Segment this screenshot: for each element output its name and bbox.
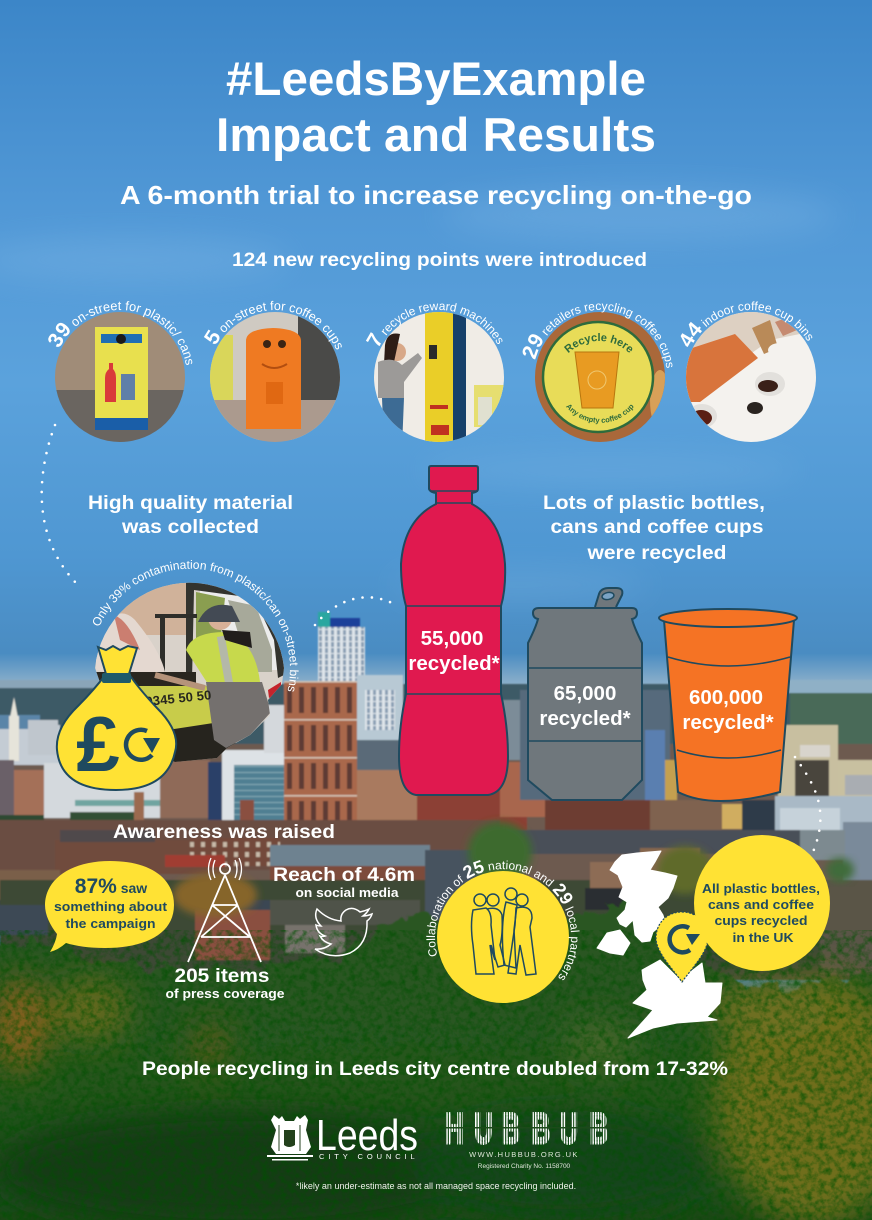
speech bubble: 87 percent: something about bbox=[54, 899, 168, 914]
plastic bottle with count bbox=[399, 466, 508, 795]
callout: recycled in the UK: cans and coffee bbox=[708, 897, 814, 912]
heading: awareness: Awareness was raised bbox=[113, 821, 335, 843]
label: 5 on-street: 5 on-street for coffee cups bbox=[204, 300, 342, 350]
photo: recycle here sticker: Any empty coffee cup bbox=[566, 404, 634, 424]
photo: orange bin bbox=[210, 312, 340, 442]
icon: transmission tower bbox=[188, 858, 261, 962]
callout: recycled in the UK: All plastic bottles, bbox=[702, 881, 820, 896]
subtitle: A 6-month trial to increase recycling on-the-go bbox=[120, 180, 752, 210]
panel: 7 recycle reward machines bbox=[366, 303, 504, 442]
photo: waste worker bbox=[95, 582, 284, 762]
icon: money bag bbox=[57, 646, 176, 790]
headline result: People recycling in Leeds city centre doubled from 17-32% bbox=[142, 1059, 728, 1080]
logo: Hubbub: HUBBUB bbox=[445, 1105, 608, 1153]
stat: social reach: Reach of 4.6m bbox=[273, 864, 415, 886]
logo: Hubbub: Registered Charity No. 1158700 bbox=[478, 1163, 571, 1170]
map: UK bbox=[597, 851, 722, 1038]
stat: press coverage: of press coverage bbox=[166, 987, 285, 1001]
plastic bottle with count: recycled* bbox=[408, 652, 500, 675]
footnote: *likely an under-estimate as not all managed space recycling included. bbox=[296, 1181, 576, 1191]
logo: Leeds City Council: Leeds bbox=[316, 1111, 418, 1160]
icon: location pin bbox=[656, 912, 708, 982]
drinks can with count bbox=[528, 588, 642, 800]
stat: social reach bbox=[273, 864, 415, 900]
panel: 39 on-street bins for plastic and cans bbox=[48, 301, 192, 442]
drinks can with count: recycled* bbox=[539, 707, 631, 730]
heading: lots recycled: were recycled bbox=[586, 543, 726, 564]
label: collaboration arc: Collaboration of 25 national and 29 local partners bbox=[426, 860, 580, 980]
stat: press coverage: 205 items bbox=[174, 965, 270, 987]
coffee cup with count bbox=[659, 609, 797, 801]
panel: worker photo bbox=[93, 560, 299, 762]
panel: 44 indoor coffee cup bins bbox=[680, 301, 816, 442]
coffee cup with count: recycled* bbox=[682, 711, 774, 734]
label: 7 recycle reward machines: 7 recycle reward machines bbox=[366, 303, 502, 346]
photo: recycle here sticker bbox=[535, 312, 665, 442]
logo: Hubbub: WWW.HUBBUB.ORG.UK bbox=[469, 1150, 579, 1159]
photo: indoor bin holes bbox=[686, 312, 816, 442]
photo: yellow bin bbox=[55, 312, 185, 442]
plastic bottle with count: 55,000 bbox=[421, 627, 483, 650]
title: #LeedsByExample bbox=[226, 53, 646, 106]
dotted connector to bottle bbox=[315, 597, 392, 625]
heading: lots recycled bbox=[543, 493, 765, 564]
icon: money bag: £ bbox=[76, 700, 120, 788]
speech bubble: 87 percent: the campaign bbox=[66, 916, 156, 931]
callout: recycled in the UK: cups recycled bbox=[714, 913, 808, 928]
logo: Leeds City Council bbox=[267, 1111, 419, 1161]
panel: 29 retailers recycling coffee cups bbox=[522, 303, 672, 442]
heading: lots recycled: Lots of plastic bottles, bbox=[543, 493, 765, 514]
icon: twitter bird bbox=[315, 908, 372, 956]
callout: recycled in the UK bbox=[694, 835, 830, 971]
speech bubble: 87 percent bbox=[45, 861, 174, 952]
label: 44 indoor bins: 44 indoor coffee cup bins bbox=[680, 301, 812, 347]
logo: Leeds City Council: CITY COUNCIL bbox=[319, 1152, 419, 1161]
photo: waste worker: 0345 50 50 bbox=[145, 687, 212, 709]
title bbox=[216, 53, 656, 162]
title: Impact and Results bbox=[216, 109, 656, 162]
stat: press coverage bbox=[166, 965, 285, 1001]
heading: lots recycled: cans and coffee cups bbox=[550, 517, 764, 538]
dotted connector right bbox=[795, 757, 820, 852]
photo: woman at reward machine bbox=[374, 312, 504, 442]
panel: partner collaboration bbox=[426, 860, 580, 1003]
icon: group of people bbox=[472, 888, 536, 975]
stat: social reach: on social media bbox=[296, 886, 400, 900]
callout: recycled in the UK: in the UK bbox=[732, 930, 794, 945]
label: 39 on-street: 39 on-street for plastic/ cans bbox=[48, 301, 192, 365]
panel: 5 on-street coffee cup bins bbox=[204, 300, 342, 442]
drinks can with count: 65,000 bbox=[554, 682, 616, 705]
label: 29 retailers: 29 retailers recycling coffee cups bbox=[522, 303, 672, 368]
label: contamination arc: Only 39% contamination from plastic/can on-street bins bbox=[93, 560, 299, 692]
dotted connector left bbox=[42, 425, 77, 584]
photo: recycle here sticker: Recycle here bbox=[564, 333, 632, 353]
heading: high quality: High quality material bbox=[88, 493, 293, 514]
coffee cup with count: 600,000 bbox=[689, 686, 763, 709]
heading: high quality bbox=[88, 493, 293, 538]
speech bubble: 87 percent: 87% saw bbox=[75, 875, 147, 898]
heading: recycling points: 124 new recycling points were introduced bbox=[232, 250, 647, 271]
heading: high quality: was collected bbox=[121, 517, 259, 538]
